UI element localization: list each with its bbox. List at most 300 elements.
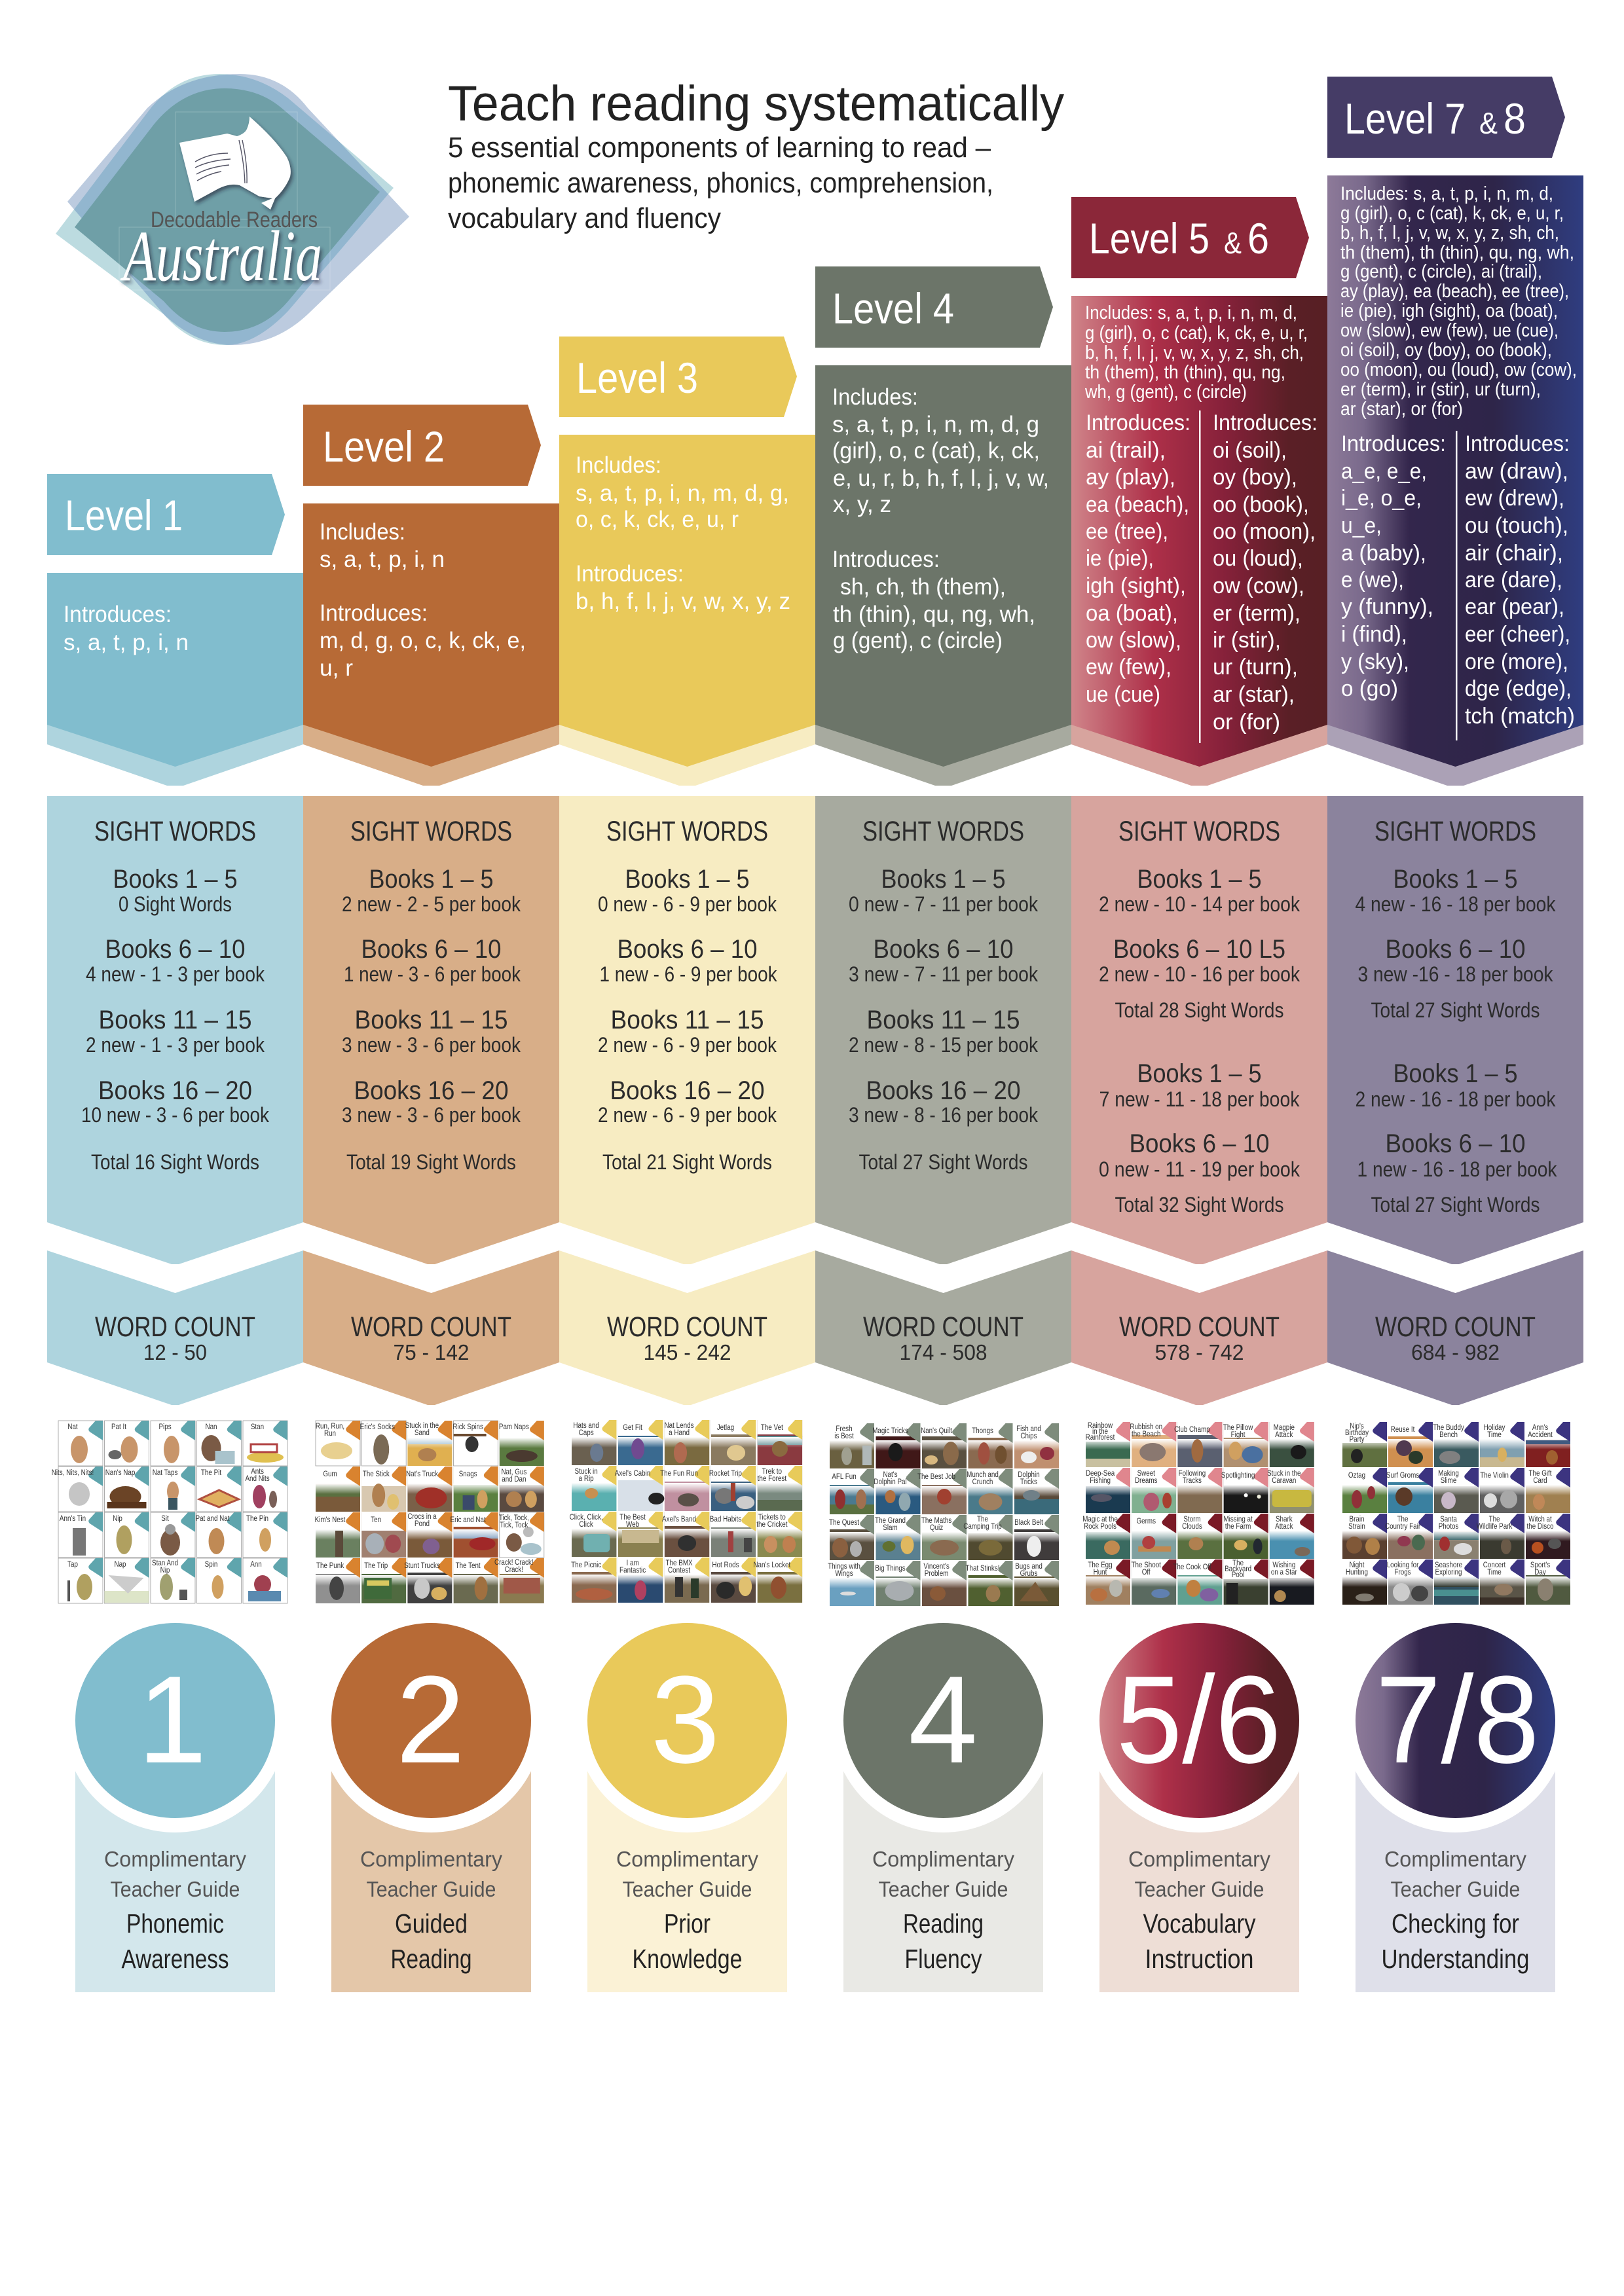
cover: Nat's Dolphin Pal: Dolphin Pal <box>874 1478 907 1486</box>
cover: Bad Habits <box>710 1512 756 1557</box>
cover: Making Slime: Slime <box>1441 1476 1456 1485</box>
cover: Witch at the Disco <box>1526 1514 1570 1559</box>
cover: The Trip <box>361 1558 406 1603</box>
cover: The Pit <box>196 1467 241 1512</box>
level 7 and 8 includes: ow (slow), ew (few), ue (cue), <box>1340 320 1559 341</box>
cover: Hot Rods <box>711 1558 756 1603</box>
cover: Tick, Tock, Tick, Tock: Tick, Tock <box>500 1521 528 1529</box>
logo text: Decodable Readers: Decodable Readers <box>151 208 318 232</box>
cover: The Buddy Bench: The Buddy <box>1433 1423 1464 1432</box>
level 5 and 6 tab <box>1071 197 1309 278</box>
cover: Thongs <box>968 1423 1012 1468</box>
level 7 and 8 introduces right: air (chair), <box>1465 541 1563 566</box>
level 7 and 8 includes: g (gent), c (circle), ai (trail), <box>1340 261 1542 282</box>
cover: Tickets to the Cricket <box>756 1512 802 1557</box>
cover: Looking for Frogs <box>1387 1559 1433 1605</box>
level 5 and 6 introduces left: ue (cue) <box>1086 682 1160 707</box>
panel: sight words level 3: Books 1 – 5 <box>625 865 749 894</box>
cover: The Backyard Pool <box>1224 1559 1268 1605</box>
cover: Stan And Nip: Stan And <box>152 1559 178 1567</box>
panel: sight words level 5 and 6: Total 28 Sight Words <box>1115 998 1283 1022</box>
cover: Kim's Nest <box>315 1512 360 1558</box>
cover: I am Fantastic <box>618 1558 663 1603</box>
panel: sight words level 4: 2 new - 8 - 15 per book <box>849 1033 1039 1057</box>
cover: Nits, Nits, Nits!: Nits, Nits, Nits! <box>52 1468 94 1477</box>
cover: The Shoot Off: Off <box>1142 1568 1151 1576</box>
number badge 2 <box>331 1623 531 1818</box>
teacher guide card: level 2: Teacher Guide <box>367 1877 496 1901</box>
teacher guide card: level 1: Awareness <box>122 1944 229 1974</box>
cover: Fresh is Best: Fresh <box>836 1425 853 1433</box>
cover: Nat's Dolphin Pal <box>874 1469 921 1514</box>
level 2 chevron shadow <box>303 725 559 786</box>
level 7 and 8 tab: & <box>1479 106 1498 140</box>
teacher guide card: level 4: Fluency <box>905 1944 982 1974</box>
cover: The Violin: The Violin <box>1480 1471 1509 1480</box>
panel: sight words level 7 and 8: 3 new -16 - 18 per book <box>1358 962 1553 986</box>
cover: Munch and Crunch: Crunch <box>972 1478 993 1486</box>
cover: Surf Groms <box>1386 1468 1433 1513</box>
level 7 and 8 includes: oi (soil), oy (boy), oo (book), <box>1340 340 1552 361</box>
level 3 tab: Level 3 <box>576 354 698 402</box>
panel: word count level 3: WORD COUNT <box>607 1311 767 1343</box>
cover: Axel's Band <box>662 1512 709 1557</box>
panel: sight words level 4: Books 16 – 20 <box>866 1076 1020 1105</box>
cover: Bugs and Grubs: Grubs <box>1020 1569 1038 1578</box>
panel: sight words level 5 and 6 <box>1071 796 1327 1264</box>
cover: Santa Photos <box>1434 1514 1479 1559</box>
teacher guide card: level 3: Teacher Guide <box>622 1877 752 1901</box>
cover: The Camping Trip <box>963 1515 1012 1560</box>
level 4 letters: e, u, r, b, h, f, l, j, v, w, <box>833 465 1049 491</box>
cover: Fresh is Best: is Best <box>834 1432 854 1440</box>
cover: Stuck in the Caravan <box>1267 1468 1314 1513</box>
cover: Axel's Cabin <box>615 1466 664 1511</box>
level 5 and 6 introduces left: oa (boat), <box>1086 601 1178 626</box>
cover: The Stick <box>361 1467 406 1512</box>
panel: word count level 7 and 8 <box>1327 1250 1583 1405</box>
cover: Dolphin Tricks <box>1014 1469 1059 1514</box>
teacher guide card: level 2: Guided <box>395 1908 468 1939</box>
cover: Nat Lends a Hand <box>664 1420 709 1465</box>
cover: Stuck in the Caravan: Caravan <box>1272 1476 1296 1485</box>
level 5 and 6 introduces right: Introduces: <box>1213 410 1318 435</box>
level 7 and 8 includes: th (them), th (thin), qu, ng, wh, <box>1340 242 1574 263</box>
level 5 and 6 introduces left: ay (play), <box>1086 465 1175 490</box>
cover: Santa Photos: Photos <box>1439 1522 1459 1531</box>
level 7 and 8 includes <box>1340 183 1577 420</box>
cover: Surf Groms: Surf Groms <box>1386 1471 1420 1480</box>
cover: Eric's Socks <box>360 1421 406 1466</box>
cover: Rubbish on the Beach <box>1130 1422 1176 1467</box>
cover: The Best Job <box>917 1469 967 1514</box>
cover: Hats and Caps: Hats and <box>573 1421 599 1430</box>
level 5 and 6 introduces right: ur (turn), <box>1213 655 1298 680</box>
cover: Brain Strain <box>1342 1514 1387 1559</box>
level 1 body <box>47 573 303 767</box>
panel: sight words level 5 and 6: Books 1 – 5 <box>1137 865 1261 894</box>
cover: The Gift Card <box>1526 1468 1570 1513</box>
panel: sight words level 7 and 8: Total 27 Sight Words <box>1371 998 1540 1022</box>
teacher guide card: level 1 <box>63 1609 287 1992</box>
panel: sight words level 4: Books 6 – 10 <box>874 935 1014 964</box>
cover: Rainbow in the Rainforest: Rainbow <box>1088 1421 1113 1430</box>
panel: sight words level 7 and 8 <box>1327 796 1583 1264</box>
cover: Eric and Nat <box>451 1512 498 1558</box>
cover: The Egg Hunt <box>1086 1559 1130 1605</box>
level 5 and 6 introduces right: oy (boy), <box>1213 465 1297 490</box>
cover: I am Fantastic: Fantastic <box>619 1566 646 1575</box>
cover: Nan <box>196 1421 241 1466</box>
cover: Crack! Crack! Crack!: Crack! <box>505 1565 523 1574</box>
panel: sight words level 3: Books 6 – 10 <box>617 935 757 964</box>
cover: Ann's Tin <box>58 1512 103 1558</box>
cover: That Stinks!: That Stinks! <box>966 1564 999 1573</box>
level 7 and 8 introduces right: are (dare), <box>1465 568 1562 592</box>
cover: Snags <box>454 1467 498 1512</box>
cover: Germs: Germs <box>1136 1517 1156 1525</box>
cover: The Grand Slam <box>875 1515 921 1560</box>
cover: Concert Time <box>1480 1559 1524 1605</box>
panel: sight words level 3: 0 new - 6 - 9 per book <box>598 892 777 916</box>
level 5 and 6 chevron shadow <box>1071 725 1327 786</box>
cover: The BMX Contest <box>665 1558 709 1603</box>
cover: Night Hunting: Night <box>1350 1561 1364 1569</box>
cover: Nat <box>58 1421 103 1466</box>
cover: The Tent <box>454 1558 498 1603</box>
panel: sight words level 5 and 6: 2 new - 10 - 14 per book <box>1099 892 1301 916</box>
level 5 and 6 introduces left: ai (trail), <box>1086 438 1166 463</box>
level 7 and 8 introduces right: eer (cheer), <box>1465 622 1570 647</box>
teacher guide card: level 7 and 8: Teacher Guide <box>1391 1877 1521 1901</box>
cover: Thongs: Thongs <box>972 1427 993 1435</box>
panel: sight words level 7 and 8: Total 27 Sight Words <box>1371 1193 1540 1216</box>
cover: Following Tracks <box>1177 1468 1222 1513</box>
panel: sight words level 7 and 8: 1 new - 16 - 18 per book <box>1357 1157 1557 1181</box>
cover: The Gift Card: The Gift <box>1529 1469 1551 1478</box>
cover: Nan's Quilt: Nan's Quilt <box>921 1427 952 1435</box>
cover: Stuck in a Rip <box>572 1466 616 1511</box>
number badge 7/8 <box>1356 1623 1555 1818</box>
cover: Stuck in a Rip: a Rip <box>579 1474 594 1483</box>
teacher guide card: level 1: Complimentary <box>104 1847 246 1871</box>
cover: The Maths Quiz: Quiz <box>930 1523 943 1532</box>
cover: Fish and Chips: Fish and <box>1016 1425 1041 1433</box>
teacher guide card: level 7 and 8 <box>1344 1609 1568 1992</box>
panel: sight words level 1: Books 1 – 5 <box>113 865 237 894</box>
level 7 and 8 introduces right: ew (drew), <box>1465 486 1564 511</box>
cover: The Best Web: The Best <box>619 1513 646 1522</box>
book covers: level 5 and 6 <box>1082 1421 1314 1605</box>
cover: The Backyard Pool: The <box>1232 1559 1244 1567</box>
panel: word count level 5 and 6: 578 - 742 <box>1155 1340 1244 1364</box>
panel: sight words level 3: 1 new - 6 - 9 per book <box>600 962 777 986</box>
panel: sight words level 2 <box>303 796 559 1264</box>
level 5 and 6 tab: 6 <box>1247 214 1269 263</box>
cover: Following Tracks: Following <box>1179 1469 1206 1478</box>
cover: The Vet: The Vet <box>761 1423 783 1432</box>
level 7 and 8 includes: ay (play), ea (beach), ee (tree), <box>1340 281 1569 302</box>
cover: The Cook Off <box>1173 1559 1222 1605</box>
cover: Magpie Attack <box>1270 1422 1314 1467</box>
cover: The Stick: The Stick <box>363 1470 390 1478</box>
cover: The Buddy Bench: Bench <box>1439 1430 1458 1439</box>
panel: sight words level 3: SIGHT WORDS <box>606 816 768 847</box>
panel: word count level 3 <box>559 1250 815 1405</box>
cover: Sit: Sit <box>161 1514 169 1523</box>
teacher guide card: level 1: Teacher Guide <box>110 1877 240 1901</box>
panel: sight words level 7 and 8: SIGHT WORDS <box>1375 816 1536 847</box>
cover: The Backyard Pool: Backyard <box>1225 1565 1251 1573</box>
panel: level 7 and 8 <box>1327 77 1583 786</box>
cover: The BMX Contest: Contest <box>668 1566 690 1575</box>
cover: Stuck in the Sand <box>405 1421 452 1466</box>
level 5 and 6 introduces right: oo (moon), <box>1213 519 1316 544</box>
cover: Nat, Gus and Dan: Nat, Gus <box>501 1468 526 1476</box>
level 4 letters: x, y, z <box>833 492 891 517</box>
cover: Crocs in a Pond: Pond <box>415 1520 430 1528</box>
book covers: level 7 and 8 <box>1342 1422 1570 1605</box>
panel: sight words level 2: Total 19 Sight Words <box>346 1150 516 1174</box>
cover: Nan's Nap: Nan's Nap <box>105 1468 135 1477</box>
level 1 letters: s, a, t, p, i, n <box>64 630 189 655</box>
cover: Crocs in a Pond <box>407 1512 452 1558</box>
level 5 and 6 introduces right: ar (star), <box>1213 682 1295 707</box>
level 2 letters: m, d, g, o, c, k, ck, e, <box>320 628 526 653</box>
level 3 letters: Introduces: <box>576 561 684 587</box>
cover: Rainbow in the Rainforest <box>1086 1421 1130 1467</box>
cover: Rubbish on the Beach: the Beach <box>1132 1430 1160 1438</box>
panel: word count level 3: 145 - 242 <box>643 1340 731 1364</box>
cover: Magic Tricks <box>872 1423 921 1468</box>
panel: sight words level 3: Total 21 Sight Words <box>602 1150 772 1174</box>
cover: Ten: Ten <box>371 1516 381 1524</box>
cover: Ten <box>361 1512 406 1558</box>
cover: Nat Taps <box>151 1467 195 1512</box>
cover: Nat Lends a Hand: Nat Lends <box>664 1421 694 1430</box>
level 7 and 8 chevron shadow <box>1327 725 1583 786</box>
cover: Magpie Attack: Magpie <box>1274 1423 1295 1432</box>
panel: sight words level 7 and 8: 4 new - 16 - 18 per book <box>1356 892 1556 916</box>
cover: Get Fit <box>618 1420 663 1465</box>
cover: Holiday Time: Holiday <box>1484 1423 1505 1432</box>
cover: Rubbish on the Beach: Rubbish on <box>1130 1423 1162 1431</box>
icon: book shaped like Australia <box>179 117 291 210</box>
cover: Kim's Nest: Kim's Nest <box>315 1516 345 1524</box>
cover: Germs <box>1132 1514 1176 1559</box>
cover: Concert Time: Concert <box>1483 1561 1505 1569</box>
level 5 and 6 includes: b, h, f, l, j, v, w, x, y, z, sh, ch, <box>1085 342 1304 363</box>
cover: The Pin <box>243 1512 287 1558</box>
panel: sight words level 5 and 6: Books 6 – 10 <box>1129 1129 1269 1158</box>
level 4 letters: g (gent), c (circle) <box>833 628 1003 653</box>
cover: Fish and Chips <box>1014 1423 1059 1468</box>
level 7 and 8 tab: 8 <box>1504 94 1526 143</box>
cover: Things with Wings: Things with <box>828 1562 860 1571</box>
subtitle text block: 5 essential components of learning to read – <box>448 132 991 164</box>
teacher guide card: level 2: Complimentary <box>360 1847 502 1871</box>
level 2 body <box>303 503 559 767</box>
level 7 and 8 includes: ie (pie), igh (sight), oa (boat), <box>1340 301 1558 321</box>
teacher guide card: level 1: Phonemic <box>126 1908 224 1939</box>
level 4 letters: sh, ch, th (them), <box>840 574 1006 600</box>
cover: Bugs and Grubs: Bugs and <box>1015 1562 1043 1571</box>
level 5 and 6 introduces left: ew (few), <box>1086 655 1172 680</box>
cover: Missing at the Farm <box>1223 1514 1268 1559</box>
cover: Black Belt <box>1014 1515 1059 1560</box>
cover: Stuck in the Sand: Stuck in the <box>405 1421 439 1430</box>
level 1 tab: Level 1 <box>65 491 183 539</box>
level 5 and 6 includes: wh, g (gent), c (circle) <box>1084 382 1247 403</box>
cover: The Grand Slam: Slam <box>883 1523 898 1532</box>
level 7 and 8 introduces right: aw (draw), <box>1465 459 1568 484</box>
level 7 and 8 introduces right: dge (edge), <box>1465 676 1572 701</box>
cover: Hot Rods: Hot Rods <box>712 1561 739 1569</box>
cover: Night Hunting <box>1342 1559 1387 1605</box>
cover: Holiday Time <box>1480 1422 1524 1467</box>
level 5 and 6 includes: Includes: s, a, t, p, i, n, m, d, <box>1085 302 1297 323</box>
level 1 chevron shadow <box>47 725 303 786</box>
cover: Stunt Trucks: Stunt Trucks <box>404 1561 440 1570</box>
cover: Nan: Nan <box>205 1423 217 1431</box>
level 5 and 6 includes: th (them), th (thin), qu, ng, <box>1085 362 1285 383</box>
level 1 letters: Introduces: <box>64 602 172 627</box>
panel: sight words level 1: 2 new - 1 - 3 per book <box>86 1033 265 1057</box>
level 5 and 6 introduces left: ea (beach), <box>1086 492 1189 517</box>
cover: Ann's Accident <box>1526 1422 1570 1467</box>
cover: Fresh is Best <box>830 1423 874 1468</box>
level 7 and 8 includes: oo (moon), ou (loud), ow (cow), <box>1340 359 1577 380</box>
cover: Witch at the Disco: Witch at <box>1528 1515 1552 1523</box>
cover: The Quest <box>829 1515 874 1560</box>
cover: Stuck in a Rip: Stuck in <box>575 1467 598 1476</box>
number badge 3: 3 <box>651 1650 720 1789</box>
level 7 and 8 introduces left: u_e, <box>1341 513 1382 538</box>
cover: Oztag <box>1342 1468 1387 1513</box>
panel: sight words level 4: 0 new - 7 - 11 per book <box>849 892 1039 916</box>
cover: Magpie Attack: Attack <box>1275 1430 1293 1439</box>
number badge 5/6: 5/6 <box>1116 1650 1281 1789</box>
panel: sight words level 2: Books 16 – 20 <box>354 1076 508 1105</box>
cover: Nat, Gus and Dan: and Dan <box>502 1475 526 1484</box>
cover: Nan's Locket <box>753 1558 802 1603</box>
book covers: level 1 <box>52 1421 287 1603</box>
cover: Club Champ <box>1174 1422 1222 1467</box>
cover: Ann's Accident: Accident <box>1528 1430 1553 1439</box>
panel: sight words level 7 and 8: Books 6 – 10 <box>1386 1129 1526 1158</box>
level 3 letters: Includes: <box>576 452 661 478</box>
cover: Reuse It: Reuse It <box>1391 1425 1414 1434</box>
cover: That Stinks! <box>966 1561 1012 1606</box>
level 5 and 6 body <box>1071 296 1327 767</box>
teacher guide card: level 3 <box>575 1609 799 1992</box>
cover: Storm Clouds: Clouds <box>1182 1522 1202 1531</box>
cover: Rocket Trip: Rocket Trip <box>709 1469 742 1478</box>
cover: Things with Wings: Wings <box>835 1569 853 1578</box>
cover: Click, Click, Click <box>570 1512 616 1557</box>
panel: sight words level 5 and 6: SIGHT WORDS <box>1118 816 1280 847</box>
subtitle text block <box>448 132 993 234</box>
cover: Deep-Sea Fishing: Fishing <box>1090 1476 1111 1485</box>
cover: The Wildlife Park: The <box>1489 1515 1500 1523</box>
cover: Jetlag <box>711 1420 756 1465</box>
panel: sight words level 1: SIGHT WORDS <box>94 816 256 847</box>
cover: Nip's Birthday Party: Birthday <box>1345 1429 1369 1437</box>
cover: Trek to the Forest: Trek to <box>762 1467 782 1476</box>
cover: Stan: Stan <box>251 1423 264 1431</box>
panel: word count level 7 and 8: 684 - 982 <box>1411 1340 1500 1364</box>
cover: Santa Photos: Santa <box>1440 1515 1457 1523</box>
cover: Seashore Exploring <box>1434 1559 1479 1605</box>
cover: Concert Time: Time <box>1487 1568 1502 1576</box>
cover: Nap <box>105 1558 149 1603</box>
cover: Sport's Day <box>1526 1559 1570 1605</box>
cover: The Camping Trip: Camping Trip <box>963 1522 1002 1531</box>
panel: sight words level 4: SIGHT WORDS <box>862 816 1024 847</box>
cover: The BMX Contest: The BMX <box>665 1559 693 1567</box>
level 3 body <box>559 435 815 767</box>
panel: sight words level 5 and 6: 0 new - 11 - 19 per book <box>1099 1157 1301 1181</box>
cover: Hats and Caps: Caps <box>579 1429 594 1437</box>
cover: Bugs and Grubs <box>1014 1561 1059 1606</box>
level 5 and 6 introduces right: ir (stir), <box>1213 628 1281 653</box>
panel: word count level 5 and 6: WORD COUNT <box>1119 1311 1280 1343</box>
cover: Nan's Nap <box>105 1467 149 1512</box>
level 7 and 8 introduces right: ou (touch), <box>1465 513 1568 538</box>
cover: Nat's Truck: Nat's Truck <box>406 1470 438 1478</box>
panel: word count level 4: 174 - 508 <box>900 1340 987 1364</box>
level 7 and 8 introduces right: ore (more), <box>1465 649 1568 674</box>
cover: Club Champ: Club Champ <box>1174 1425 1210 1434</box>
cover: Making Slime: Making <box>1438 1469 1459 1478</box>
panel: sight words level 7 and 8: Books 1 – 5 <box>1393 1059 1518 1088</box>
level 5 and 6 introduces left: igh (sight), <box>1086 574 1186 598</box>
cover: The Fun Run <box>660 1466 709 1511</box>
level 7 and 8 introduces left: e (we), <box>1341 568 1404 592</box>
teacher guide card: level 4: Complimentary <box>872 1847 1014 1871</box>
teacher guide card: level 2: Reading <box>390 1944 471 1974</box>
cover: Jetlag: Jetlag <box>717 1423 734 1432</box>
level 2 letters <box>320 519 526 681</box>
panel: sight words level 5 and 6: Total 32 Sight Words <box>1115 1193 1283 1216</box>
cover: Vincent's Problem <box>922 1561 967 1606</box>
cover: Sweet Dreams: Sweet <box>1137 1469 1155 1478</box>
level 3 letters: o, c, k, ck, e, u, r <box>576 507 739 532</box>
cover: The Pin: The Pin <box>246 1514 268 1523</box>
level 7 and 8 includes: er (term), ir (stir), ur (turn), <box>1340 379 1541 400</box>
level 5 and 6 introduces left: ie (pie), <box>1086 546 1154 571</box>
cover: The Pillow Fight: The Pillow <box>1223 1423 1253 1432</box>
cover: The Shoot Off <box>1132 1559 1176 1605</box>
cover: Nap: Nap <box>114 1560 126 1569</box>
cover: Pat It: Pat It <box>111 1423 126 1431</box>
cover: Rainbow in the Rainforest: Rainforest <box>1086 1433 1115 1442</box>
level 7 and 8 includes: ar (star), or (for) <box>1340 399 1463 420</box>
panel: word count level 1: 12 - 50 <box>143 1340 207 1364</box>
cover: The Maths Quiz: The Maths <box>921 1516 951 1525</box>
level 7 and 8 tab: Level 7 <box>1344 94 1466 143</box>
cover: The Country Fair <box>1385 1514 1433 1559</box>
cover: Sweet Dreams: Dreams <box>1135 1476 1158 1485</box>
cover: Stunt Trucks <box>404 1558 452 1603</box>
panel: sight words level 1: Total 16 Sight Words <box>91 1150 259 1174</box>
cover: Nan's Quilt <box>921 1423 967 1468</box>
panel: level 5 and 6 <box>1071 197 1327 786</box>
teacher guide card: level 7 and 8: Understanding <box>1382 1944 1530 1974</box>
level 7 and 8 introduces left: i (find), <box>1341 622 1407 647</box>
cover: Axel's Cabin: Axel's Cabin <box>615 1469 650 1478</box>
level 5 and 6 introduces right: or (for) <box>1213 710 1280 735</box>
